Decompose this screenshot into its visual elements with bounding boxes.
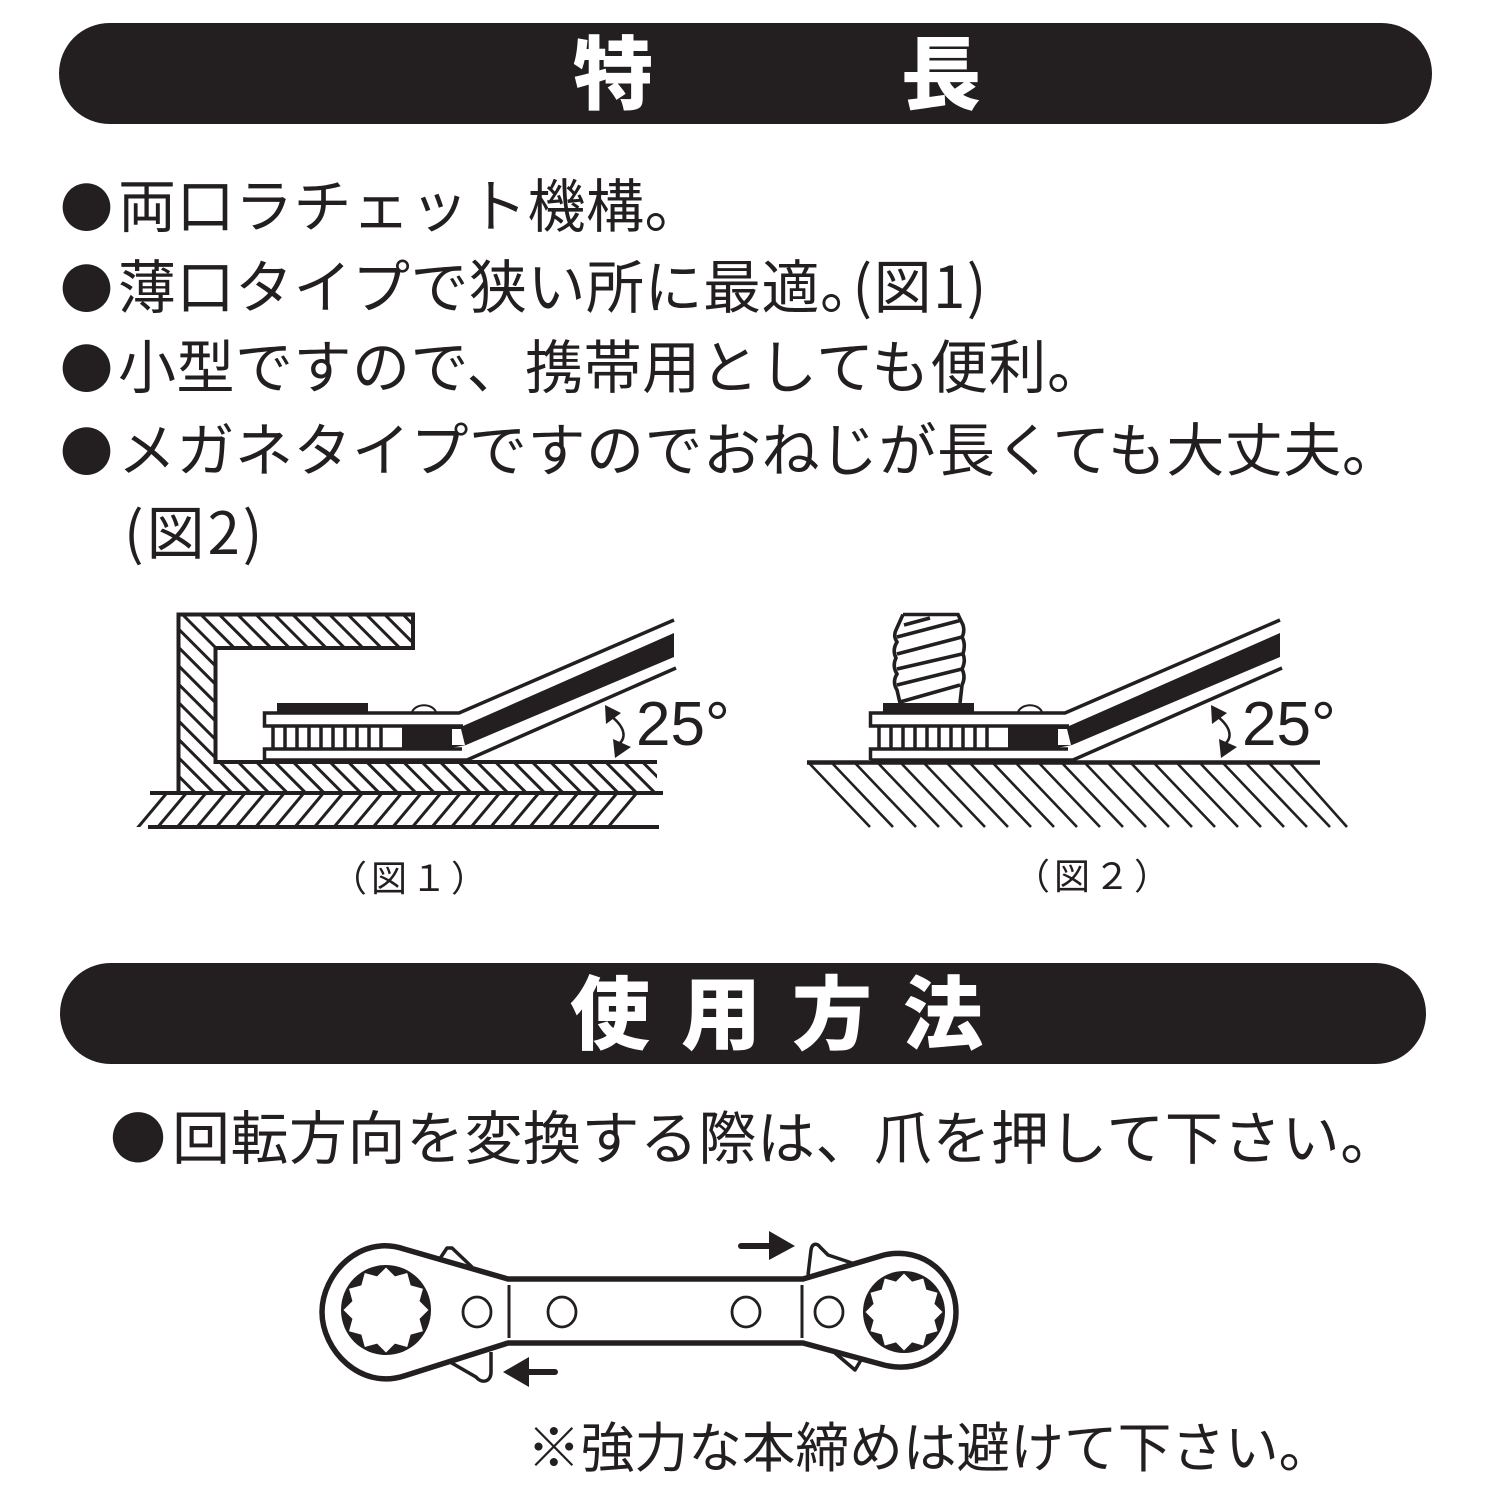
angle arrow — [605, 705, 631, 758]
angle label: 25° — [636, 690, 730, 759]
feature line 2: ● — [60, 248, 113, 324]
arrow: push left — [503, 1357, 555, 1387]
figure 1: wrench under overhang — [134, 614, 730, 902]
dividers — [509, 1285, 802, 1338]
left socket — [341, 1265, 431, 1355]
wrench top view — [322, 1231, 956, 1387]
wrench side view — [264, 620, 676, 760]
angle label: 25° — [1242, 690, 1336, 759]
feature line 4 continuation: (図2) — [124, 487, 265, 571]
feature line 4: ● — [60, 411, 113, 487]
heading bar: usage — [60, 963, 1426, 1064]
base plate hatched — [134, 793, 647, 827]
heading bar: features: 特 — [573, 11, 653, 127]
text: usage instruction: 回転方向を変換する際は、爪を押して下さい。 — [172, 1092, 1399, 1176]
text: note: ※強力な本締めは避けて下さい。 — [527, 1406, 1332, 1483]
feature line 3: 小型ですので、携帯用としても便利。 — [118, 321, 1106, 405]
feature line 1: ● — [60, 167, 113, 243]
caption figure 1: （図１） — [331, 850, 491, 902]
heading bar: usage: 法 — [903, 951, 983, 1067]
ground line — [807, 760, 1320, 765]
feature line 2: 薄口タイプで狭い所に最適。(図1) — [118, 241, 988, 325]
arrow: push right — [741, 1231, 795, 1260]
right socket — [863, 1271, 945, 1353]
heading bar: usage: 用 — [681, 951, 761, 1067]
figure 2: wrench over long bolt — [807, 614, 1347, 900]
heading bar: usage: 使 — [570, 951, 650, 1067]
bolt — [894, 614, 964, 703]
text: usage instruction: ● — [110, 1095, 166, 1176]
caption figure 2: （図２） — [1014, 848, 1174, 900]
heading bar: features — [59, 23, 1432, 124]
holes — [463, 1297, 843, 1327]
angle arrow — [1211, 705, 1237, 758]
frame outline — [178, 614, 657, 793]
overhang frame hatched — [178, 614, 657, 794]
text block: feature list — [60, 160, 1400, 571]
heading bar: features: 長 — [901, 11, 981, 127]
claws — [439, 1244, 861, 1381]
wrench side view — [870, 620, 1282, 760]
feature line 1: 両口ラチェット機構。 — [118, 160, 703, 244]
base plate lines — [148, 793, 663, 827]
wrench outline — [322, 1246, 956, 1379]
feature line 4: メガネタイプですのでおねじが長くても大丈夫。 — [118, 404, 1400, 488]
ground hatching — [809, 763, 1347, 827]
heading bar: usage: 方 — [792, 951, 872, 1067]
feature line 3: ● — [60, 328, 113, 404]
